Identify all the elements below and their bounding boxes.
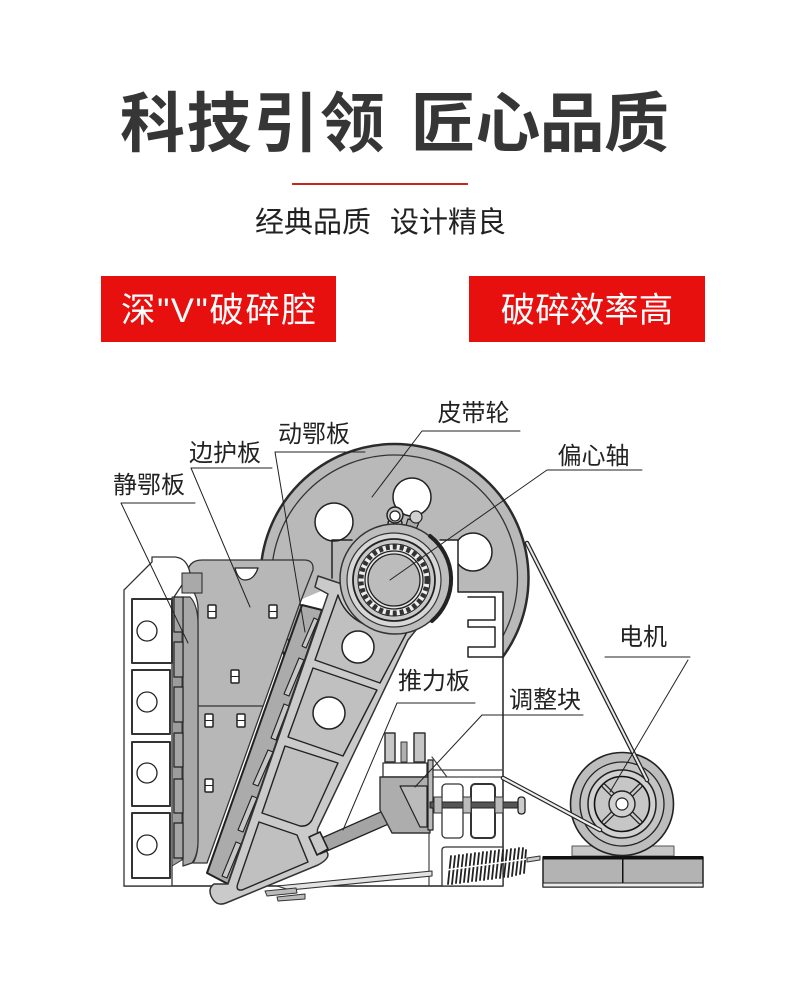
adjusting rod xyxy=(430,797,525,814)
title: 匠心品质 xyxy=(411,87,669,160)
pitman (moving jaw body) xyxy=(210,576,440,904)
badge: deep V crushing chamber: 深"V"破碎腔 xyxy=(121,292,316,330)
flywheel xyxy=(260,444,528,712)
label: static jaw plate: 静鄂板 xyxy=(113,472,185,499)
motor base xyxy=(543,846,703,887)
badge: high crushing efficiency: 破碎效率高 xyxy=(501,292,673,330)
eccentric shaft bearing xyxy=(340,507,451,634)
diagram: jaw crusher xyxy=(100,400,703,926)
label: toggle plate: 推力板 xyxy=(398,668,470,695)
side guard plate xyxy=(187,560,313,863)
title xyxy=(120,87,669,160)
subtitle xyxy=(255,206,506,239)
badge: deep V crushing chamber xyxy=(101,276,336,342)
toggle plate xyxy=(309,802,404,855)
badge: high crushing efficiency xyxy=(469,276,705,342)
label: moving jaw plate: 动鄂板 xyxy=(278,421,350,448)
subtitle: 经典品质 xyxy=(255,206,371,239)
label: eccentric shaft: 偏心轴 xyxy=(558,443,630,470)
subtitle: 设计精良 xyxy=(390,206,506,239)
motor pulley xyxy=(570,752,674,856)
label: adjusting block: 调整块 xyxy=(509,687,581,714)
title: 科技引领 xyxy=(120,87,385,160)
main frame xyxy=(100,540,510,926)
tension rod xyxy=(265,871,432,901)
label: pulley: 皮带轮 xyxy=(438,400,510,427)
tension spring xyxy=(442,847,540,886)
label: motor: 电机 xyxy=(619,624,667,651)
static jaw frame xyxy=(124,557,202,886)
title accent rule xyxy=(292,183,468,185)
moving jaw plate xyxy=(207,605,322,884)
label: side guard plate: 边护板 xyxy=(189,440,261,467)
adjusting block xyxy=(380,733,433,833)
drive belt xyxy=(503,543,647,830)
leader lines xyxy=(121,431,690,830)
